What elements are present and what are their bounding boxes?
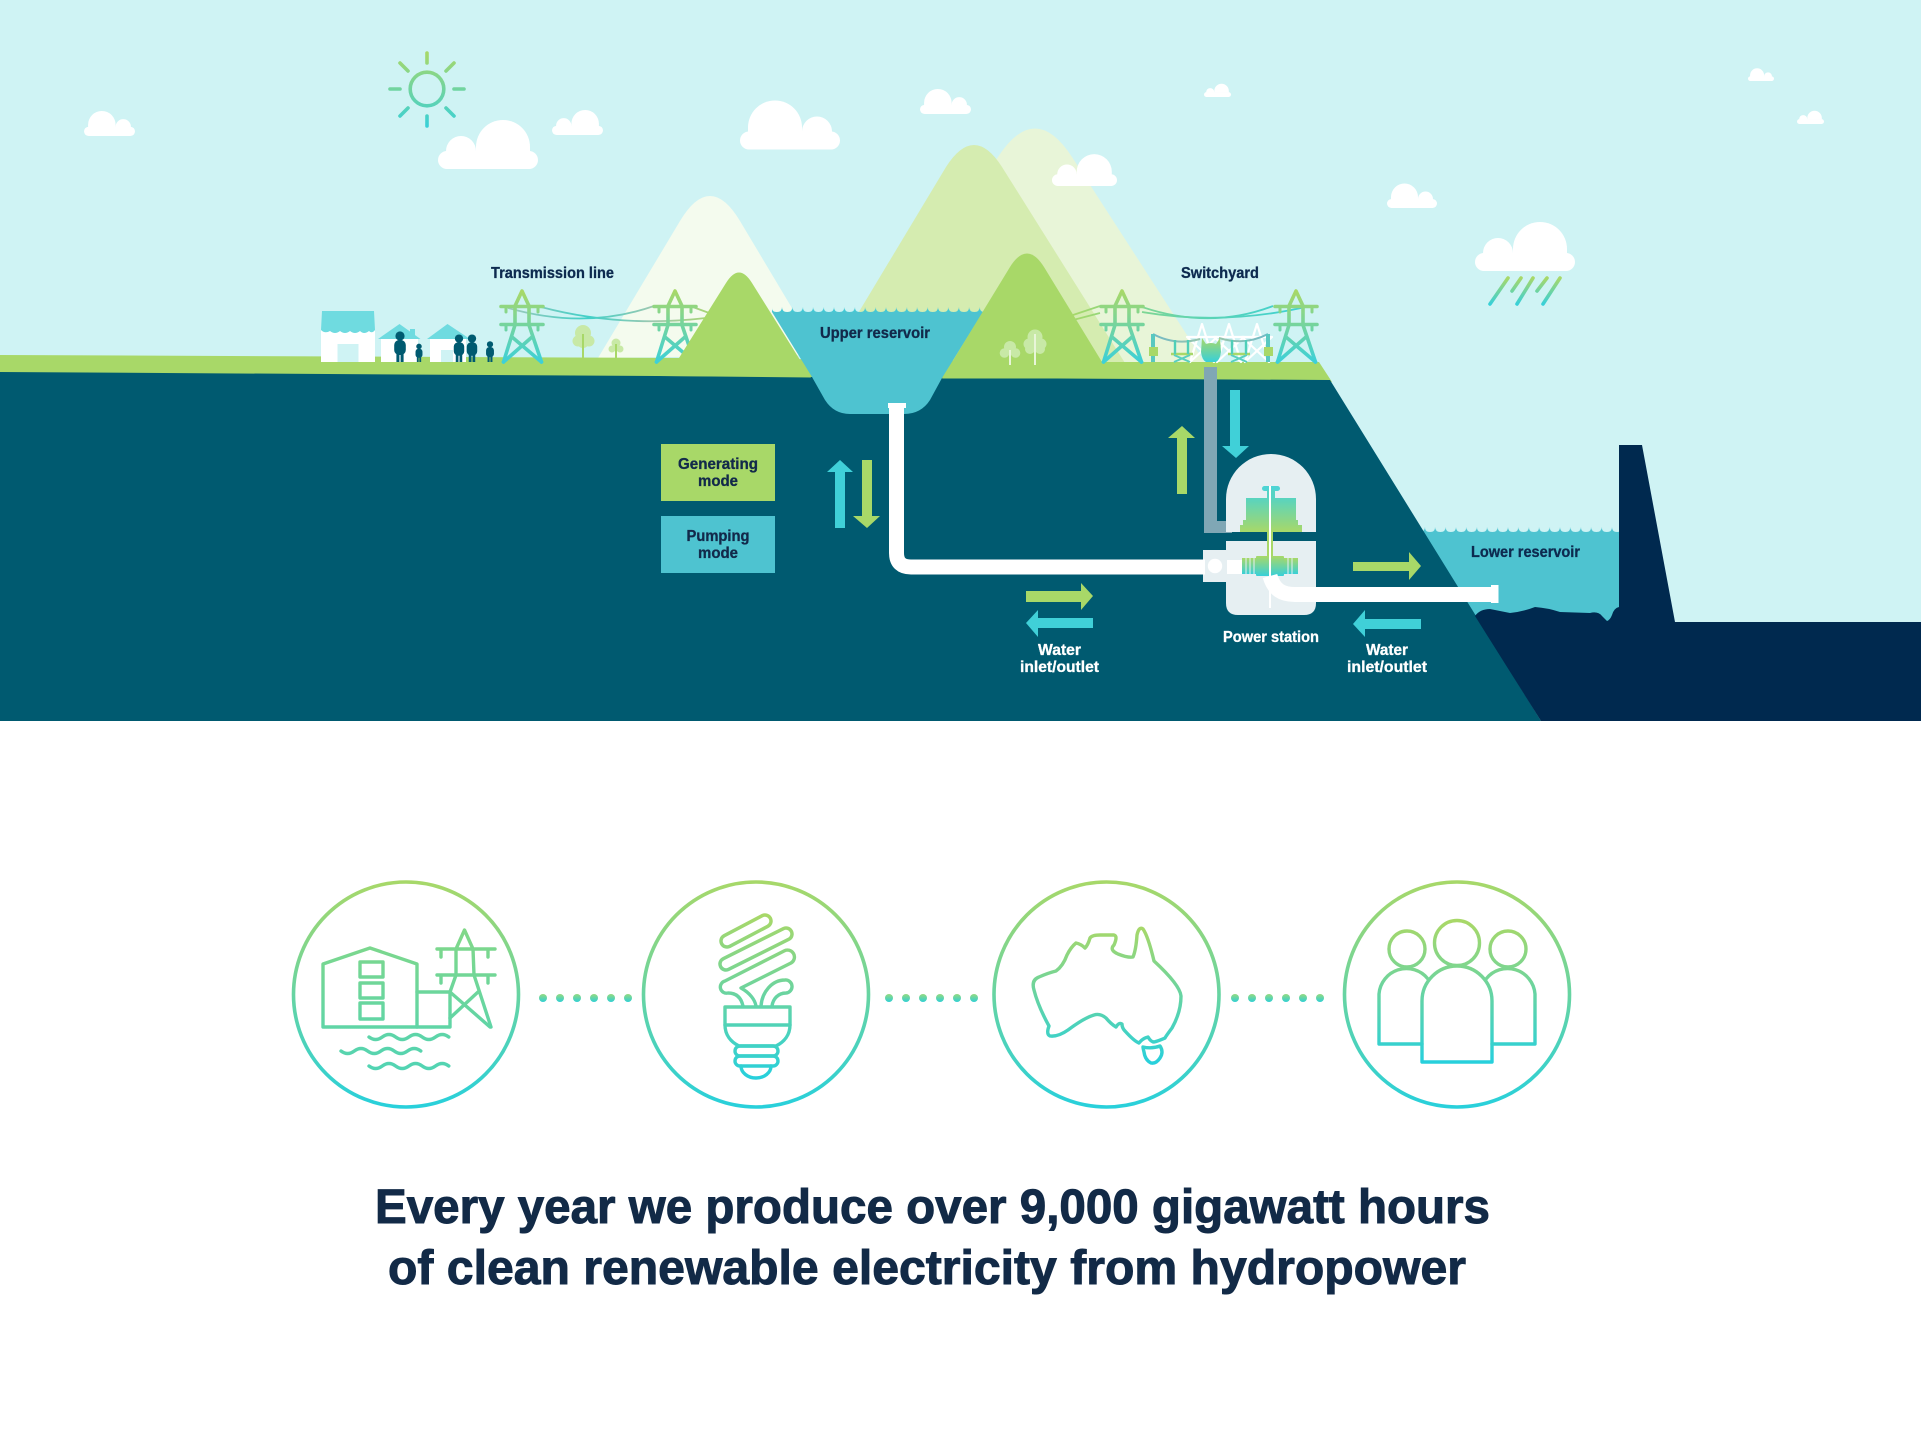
icon circle: group of people [1344,882,1570,1107]
legend: pumping mode [661,516,775,573]
trees on the plain [572,325,624,358]
label: lower reservoir: Lower reservoir [1471,544,1580,561]
arrow: pumping down at station [1222,390,1249,458]
arrow: generating up at station [1168,426,1195,494]
trees on right mountain [1000,330,1046,365]
upper reservoir [772,307,983,414]
label: transmission line: Transmission line [491,265,614,282]
legend: pumping mode: mode [698,545,738,562]
left green mountain [660,272,811,378]
label: water inlet/outlet right: Water [1366,642,1408,659]
generator [1240,486,1302,576]
lower reservoir water [1421,527,1619,622]
sun icon [390,53,464,126]
arrow: inlet teal left [1026,610,1093,637]
house 1 [378,324,420,362]
clouds [84,68,1824,208]
arrow: pumping up, upper [827,460,853,528]
dotted connector 2 [885,994,978,1002]
power station [1203,454,1316,615]
shop building [321,311,375,362]
arrow: outlet teal left [1353,610,1421,637]
legend: pumping mode: Pumping [686,528,750,545]
sky background [0,0,1921,720]
grey penstock pipe [1204,367,1232,533]
label: water inlet/outlet right: inlet/outlet [1347,659,1427,676]
headrace pipe [888,403,1205,567]
headline [375,1181,1490,1295]
house 2 [427,324,470,362]
tailrace pipe [1270,576,1498,603]
right green mountain [942,254,1102,378]
switchyard equipment [1149,334,1273,362]
legend: generating mode: Generating [678,456,758,473]
transmission tower 2 [654,291,696,362]
label: upper reservoir: Upper reservoir [820,325,930,342]
headline: of clean renewable electricity from hydropower [388,1242,1466,1295]
background mountains [598,128,1205,363]
people [394,331,494,362]
icon circle: light bulb [644,882,868,1107]
arrow: generating down, upper [853,460,880,528]
switchyard white lattice [1187,324,1272,362]
arrow: inlet green right [1026,583,1093,610]
transmission tower 4 [1275,291,1317,362]
icon circle: hydro station and tower [294,882,518,1107]
rain cloud [1475,222,1575,304]
label: power station: Power station [1223,629,1319,646]
dotted connector 3 [1231,994,1324,1002]
transmission tower 1 [501,291,543,362]
legend: generating mode: mode [698,473,738,490]
headline: Every year we produce over 9,000 gigawatt hours [375,1181,1490,1234]
transmission wires left [508,306,712,321]
transmission tower 3 [1101,291,1143,362]
label: water inlet/outlet left: Water [1038,642,1081,659]
switchyard wires right [1073,306,1310,320]
arrow: outlet green right [1353,552,1421,580]
underground rock [0,372,1541,721]
dotted connector 1 [539,994,632,1002]
icon circle: map of Australia [994,882,1219,1107]
legend: generating mode [661,444,775,501]
label: switchyard: Switchyard [1181,265,1259,282]
label: water inlet/outlet left: inlet/outlet [1020,659,1099,676]
dam and lake bed [1475,445,1921,721]
label: water inlet/outlet right [1347,642,1427,676]
grass strip [0,355,1332,382]
label: water inlet/outlet left [1020,642,1099,676]
